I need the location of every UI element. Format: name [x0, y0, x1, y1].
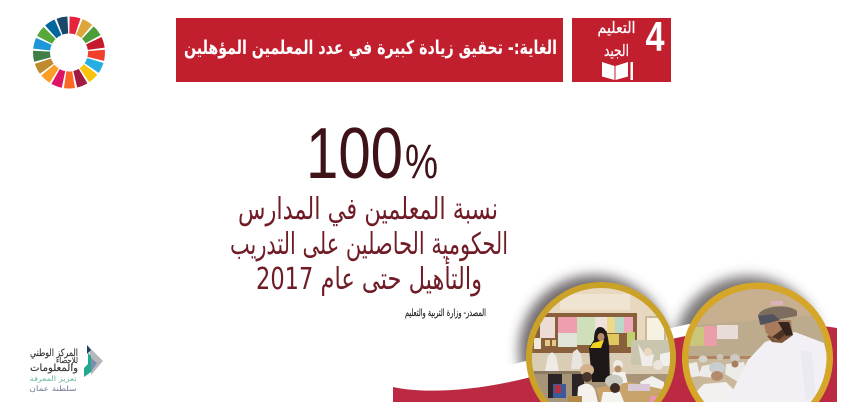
text block: statistic description: نسبة المعلمين في المدارس — [238, 192, 498, 227]
text block: statistic description — [230, 192, 508, 297]
text block: statistic description: الحكومية الحاصلين على التدريب — [230, 227, 508, 262]
goal title line 1: التعليم — [598, 18, 636, 37]
logo mark — [84, 345, 103, 377]
logo tagline: تعزيز المعرفة — [30, 375, 77, 383]
front desks — [596, 382, 662, 402]
turban — [758, 306, 797, 325]
panel: target banner — [176, 18, 563, 82]
logo wordmark: المركز الوطني — [30, 348, 78, 359]
logo wordmark — [30, 348, 78, 374]
icon: open book and pencil — [602, 62, 633, 80]
logo country: سلطنة عمان — [30, 385, 77, 393]
wall posters — [690, 327, 704, 346]
text block: statistic description: والتأهيل حتى عام 2017 — [256, 257, 482, 297]
red swoosh — [393, 324, 837, 402]
banner heading: الغاية:- تحقيق زيادة كبيرة في عدد المعلمين المؤهلين — [184, 37, 557, 59]
headline figure: 100%: 100 — [306, 114, 403, 194]
white swoosh band — [512, 324, 828, 380]
window — [645, 316, 666, 341]
seated students and desks — [530, 374, 672, 402]
notice boards — [530, 313, 637, 353]
photo: teacher in turban with students — [682, 282, 833, 402]
students — [688, 362, 700, 378]
photo: classroom with teacher — [526, 282, 676, 402]
logo wordmark: للإحصاء — [56, 356, 78, 366]
goal number: 4 — [646, 13, 665, 60]
panel: goal 4 badge — [572, 13, 671, 82]
front students — [577, 384, 598, 402]
logo: national centre for statistics and information — [30, 345, 103, 393]
source note: المصدر- وزارة التربية والتعليم — [405, 308, 486, 319]
panel: swoosh and photos — [380, 275, 850, 402]
students in white — [612, 372, 628, 384]
icon: SDG colour wheel — [30, 14, 108, 91]
grey board — [631, 340, 673, 365]
goal title line 2: الجيد — [604, 41, 629, 60]
teacher — [589, 327, 610, 382]
logo wordmark: والمعلومات — [30, 363, 78, 374]
headline figure: 100%: % — [405, 136, 438, 189]
man in white dishdasha — [727, 332, 830, 402]
circle drop shadows — [510, 266, 827, 364]
